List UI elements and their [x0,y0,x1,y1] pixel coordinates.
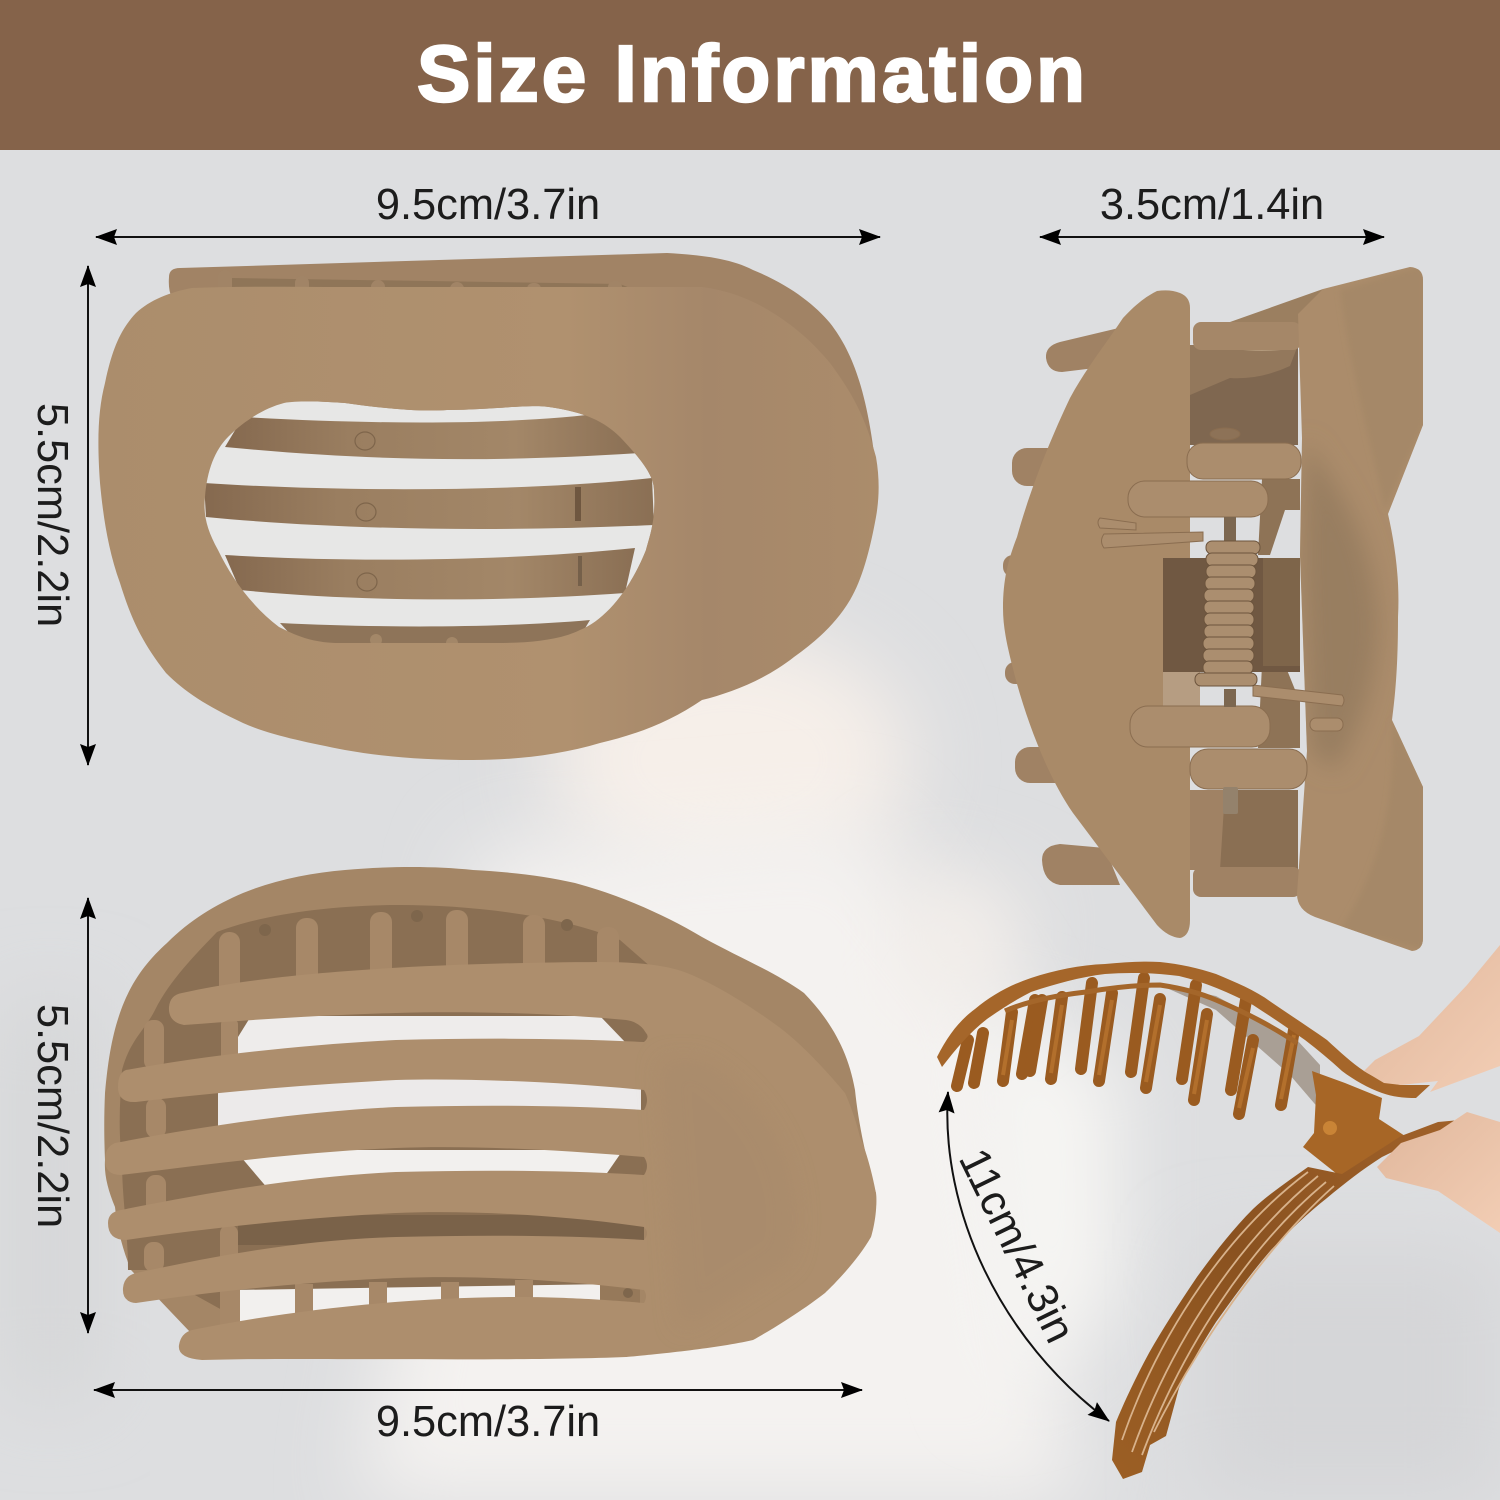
upper arc [937,962,1430,1098]
teeth tips [218,270,622,296]
plate shading [660,1060,795,1330]
left jaw lower light area [1163,672,1200,708]
window bars [225,412,640,459]
title: Size Information [417,29,1085,118]
gap: first slot [238,1016,625,1060]
lower arc [1112,1119,1471,1479]
tooth highlights [1003,1000,1294,1108]
small holes [259,910,633,1298]
lower finger [1377,1112,1500,1233]
left jaw [1003,290,1190,938]
hinge [1303,1071,1405,1178]
window see-through area [204,401,654,649]
dimension: bottom height: 5.5cm/2.2in [28,1004,76,1228]
back jaw [169,253,878,620]
centre recess [1163,558,1300,672]
bottom bar [1193,867,1301,897]
top bar [1193,322,1301,350]
right jaw shading [1303,265,1425,950]
clip: underside view with teeth [104,867,876,1360]
rear jaw piece [1230,289,1323,330]
lower arc ribs [1122,1172,1334,1455]
amber claw clip open [937,962,1471,1479]
central dark cavity [1190,345,1298,445]
dimension: arc length: 11cm/4.3in [949,1141,1084,1350]
clip: top view [98,253,879,760]
upper finger [1364,945,1500,1092]
axle [1224,517,1236,543]
top and left cavity [120,905,660,1320]
outer rim [104,867,876,1332]
dimension: side width: 3.5cm/1.4in [1100,181,1324,229]
teeth [144,910,619,1338]
right jaw [1297,267,1423,951]
gap: fifth slot [235,1284,640,1345]
header banner [0,0,1500,150]
gap: third slot [235,1150,623,1190]
front body with oval window [98,287,879,760]
back jaw recess [232,278,640,292]
clip: side view with spring [1003,265,1425,951]
spring [1195,541,1260,686]
axle end [1223,787,1238,814]
teeth left [1003,327,1123,885]
dimension: top width: 9.5cm/3.7in [376,181,600,229]
dimension: top height: 5.5cm/2.2in [28,403,76,627]
dimension: arc length [947,1092,1109,1421]
pivot discs and arms [1098,428,1344,789]
front plate with six fingers [105,962,876,1360]
dimension: bottom width: 9.5cm/3.7in [376,1398,600,1446]
gap: second slot [218,1078,641,1128]
upper gap arc [1258,479,1300,555]
dark fourth slot [238,1215,644,1245]
upper teeth [957,978,1294,1114]
metal strip behind [1160,985,1320,1110]
inner rail [1005,985,1297,1043]
fingers [1364,945,1500,1233]
